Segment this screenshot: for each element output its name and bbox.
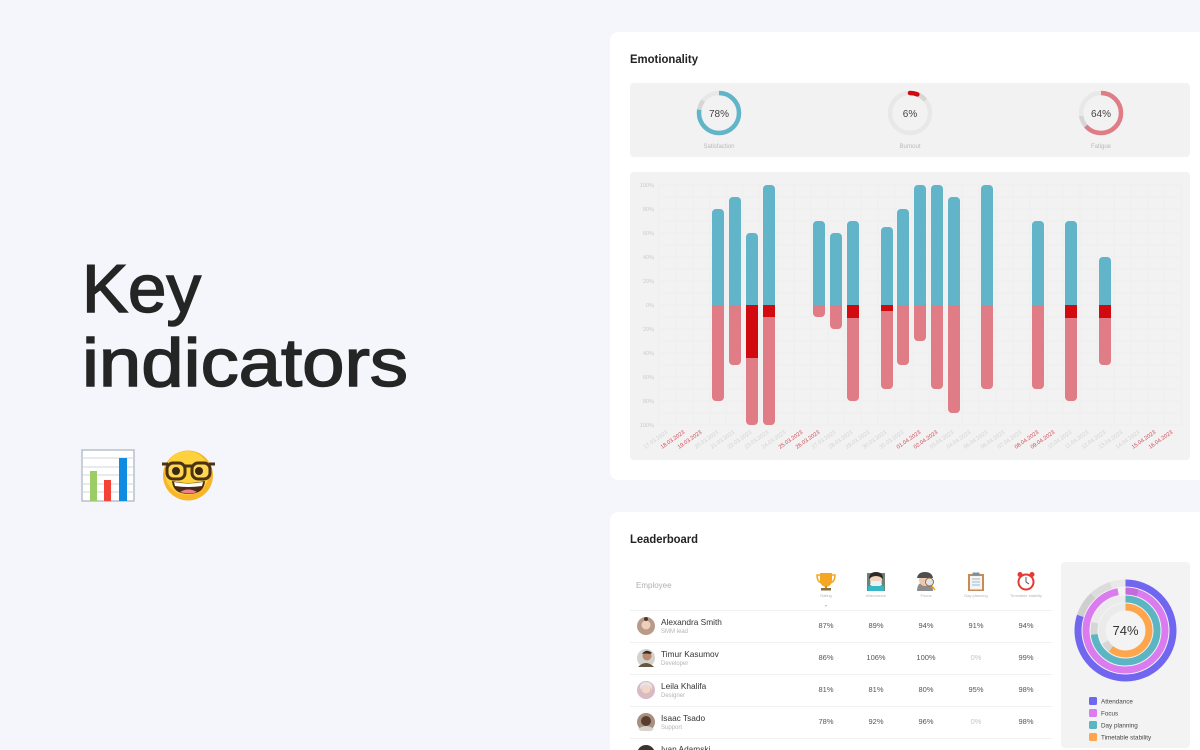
x axis dates: 29.03.2023 — [845, 430, 871, 451]
ring: day planning — [1094, 599, 1157, 662]
ring: attendance — [1078, 583, 1173, 678]
row: Timur Kasumov: 100% — [916, 653, 936, 662]
row: Leila Khalifa: Designer — [661, 693, 685, 699]
row: Timur Kasumov: 99% — [1018, 653, 1034, 662]
heading: leaderboard: Leaderboard — [630, 532, 698, 546]
y axis labels: 60% — [643, 375, 654, 381]
row: Leila Khalifa: 98% — [1018, 685, 1034, 694]
x axis dates: 04.04.2023 — [946, 430, 972, 451]
row: Leila Khalifa: Leila Khalifa — [661, 681, 707, 691]
row: Isaac Tsado — [637, 713, 1034, 731]
icon: person with mask — [866, 572, 887, 598]
row: Alexandra Smith: Alexandra Smith — [661, 617, 722, 627]
x axis dates: 12.04.2023 — [1081, 430, 1107, 451]
gauge: satisfaction — [699, 93, 739, 150]
row: Alexandra Smith: 94% — [1018, 621, 1034, 630]
x axis dates: 27.03.2023 — [811, 430, 837, 451]
legend: Day planning — [1101, 722, 1138, 730]
x axis dates: 05.04.2023 — [963, 430, 989, 451]
panel: attendance rings — [1061, 562, 1190, 748]
row: Alexandra Smith: 87% — [818, 621, 834, 630]
row: Isaac Tsado: 96% — [918, 717, 934, 726]
ring value: 74% — [1112, 623, 1139, 638]
gauge: fatigue: 64% — [1091, 109, 1111, 120]
burnout segments — [746, 305, 1111, 358]
icon: person with mask: Attendance — [866, 593, 887, 598]
gauge: burnout: 6% — [903, 109, 917, 120]
row: Isaac Tsado: Isaac Tsado — [661, 713, 706, 723]
row: Alexandra Smith: 91% — [968, 621, 984, 630]
gauge: satisfaction: Satisfaction — [703, 144, 735, 150]
y axis labels: 100% — [640, 423, 654, 429]
x axis dates: 20.03.2023 — [694, 430, 720, 451]
row: Timur Kasumov: 0% — [971, 653, 982, 662]
row: Isaac Tsado: 0% — [971, 717, 982, 726]
row: Timur Kasumov: 106% — [866, 653, 886, 662]
x axis dates: 31.03.2023 — [879, 430, 905, 451]
x axis dates: 11.04.2023 — [1064, 430, 1090, 450]
panel: donut gauges — [630, 83, 1190, 157]
x axis dates: 19.03.2023 — [677, 430, 703, 451]
icon: alarm clock — [1010, 572, 1042, 598]
row: Leila Khalifa: 81% — [868, 685, 884, 694]
heading: emotionality: Emotionality — [630, 52, 698, 66]
icon: nerd face emoji — [162, 450, 215, 500]
table header: Employee — [636, 581, 672, 590]
legend: Timetable stability — [1101, 734, 1152, 742]
x axis dates: 09.04.2023 — [1030, 430, 1056, 451]
x axis dates: 06.04.2023 — [980, 430, 1006, 451]
x axis dates: 28.03.2023 — [828, 430, 854, 451]
x axis dates: 30.03.2023 — [862, 430, 888, 451]
x axis dates: 02.04.2023 — [913, 430, 939, 451]
row: Timur Kasumov: 86% — [818, 653, 834, 662]
row: Isaac Tsado: 78% — [818, 717, 834, 726]
icon: bar chart emoji — [82, 450, 134, 501]
y axis labels: 20% — [643, 327, 654, 333]
row: Isaac Tsado: Support — [661, 725, 682, 731]
x axis dates: 07.04.2023 — [997, 430, 1023, 451]
row: Alexandra Smith: SMM lead — [661, 629, 688, 635]
positive bars — [712, 185, 1111, 315]
y axis labels: 0% — [646, 303, 654, 309]
x axis dates: 08.04.2023 — [1014, 430, 1040, 451]
y axis labels: 80% — [643, 399, 654, 405]
y axis labels: 40% — [643, 351, 654, 357]
row: Alexandra Smith: 89% — [868, 621, 884, 630]
negative bars — [712, 295, 1111, 425]
icon: alarm clock: Timetable stability — [1010, 593, 1042, 598]
gauge: burnout: Burnout — [899, 144, 921, 150]
ring: focus — [1086, 591, 1165, 670]
legend: Focus — [1101, 710, 1118, 718]
icon: detective — [917, 572, 935, 598]
row: Ivan Adamski — [637, 744, 711, 750]
x axis dates: 25.03.2023 — [778, 430, 804, 451]
table header — [636, 572, 1042, 608]
y axis labels: 20% — [643, 279, 654, 285]
row: Leila Khalifa: 80% — [918, 685, 934, 694]
panel: emotionality — [610, 32, 1200, 480]
ring: timetable stability — [1102, 607, 1149, 654]
title — [82, 251, 408, 401]
icon: clipboard: Day planning — [964, 593, 988, 598]
row: Timur Kasumov — [637, 649, 1034, 667]
gauge: fatigue: Fatigue — [1091, 144, 1112, 150]
row: Isaac Tsado: 98% — [1018, 717, 1034, 726]
title: Key — [82, 251, 201, 327]
x axis dates: 17.03.2023 — [643, 430, 669, 451]
y axis labels: 80% — [643, 207, 654, 213]
x axis dates: 21.03.2023 — [710, 430, 736, 451]
icon: trophy: ▾ — [825, 603, 827, 608]
legend: Attendance — [1101, 698, 1133, 706]
x axis dates: 15.04.2023 — [1131, 430, 1157, 451]
row: Alexandra Smith — [637, 617, 1034, 635]
row: Timur Kasumov: Timur Kasumov — [661, 649, 720, 659]
bar chart: daily emotionality — [630, 172, 1190, 460]
x axis dates: 16.04.2023 — [1148, 430, 1174, 451]
panel: leaderboard — [610, 512, 1200, 750]
y axis labels — [640, 183, 654, 429]
title: indicators — [82, 325, 408, 401]
icon: trophy: Rating — [820, 593, 832, 598]
row: Alexandra Smith: 94% — [918, 621, 934, 630]
x axis dates: 26.03.2023 — [795, 430, 821, 451]
row: Leila Khalifa: 95% — [968, 685, 984, 694]
row: Timur Kasumov: Developer — [661, 661, 688, 667]
gauge: satisfaction: 78% — [709, 109, 729, 120]
x axis dates: 03.04.2023 — [929, 430, 955, 451]
icon: detective: Focus — [921, 593, 931, 598]
gauge: fatigue — [1081, 93, 1121, 150]
gauge: burnout — [890, 93, 930, 150]
icon: clipboard — [964, 572, 988, 598]
legend — [1089, 697, 1152, 742]
row: Leila Khalifa — [637, 681, 1034, 699]
y axis labels: 40% — [643, 255, 654, 261]
x axis dates: 01.04.2023 — [896, 430, 922, 451]
x axis dates: 23.03.2023 — [744, 430, 770, 451]
x axis dates: 22.03.2023 — [727, 430, 753, 451]
y axis labels: 60% — [643, 231, 654, 237]
y axis labels: 100% — [640, 183, 654, 189]
icon: trophy — [817, 573, 835, 608]
x axis dates: 18.03.2023 — [660, 430, 686, 451]
x axis dates: 13.04.2023 — [1098, 430, 1124, 451]
row: Leila Khalifa: 81% — [818, 685, 834, 694]
x axis dates — [643, 430, 1174, 451]
x axis dates: 10.04.2023 — [1047, 430, 1073, 451]
x axis dates: 14.04.2023 — [1115, 430, 1141, 451]
x axis dates: 24.03.2023 — [761, 430, 787, 451]
row: Isaac Tsado: 92% — [868, 717, 884, 726]
